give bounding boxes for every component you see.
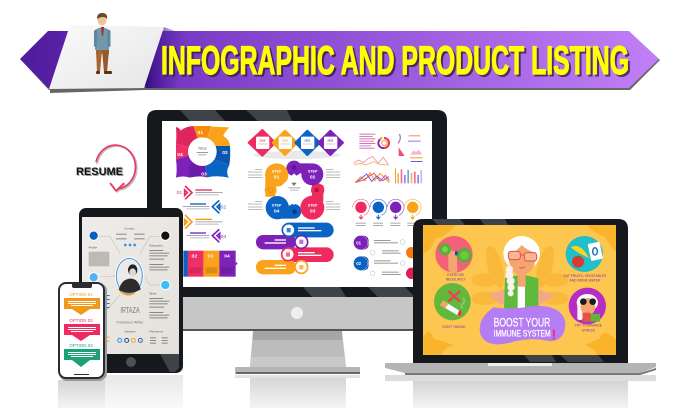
step diagram: 02: [310, 174, 316, 180]
lid highlights: [432, 219, 604, 362]
wheel numbers: 02: [222, 150, 228, 156]
laptop: [385, 219, 656, 375]
wheel hub text: TITLE: [198, 146, 206, 150]
woman illustration: [488, 236, 557, 311]
banner ribbon: [20, 31, 659, 88]
smartphone: [58, 282, 107, 381]
monitor chin: [147, 290, 447, 331]
numbered tabs: [183, 251, 238, 277]
phone screen: [60, 284, 103, 377]
skill bars: [105, 295, 110, 308]
floor reflections: [58, 375, 656, 408]
phone notch: [72, 284, 92, 288]
reference heading: Reference: [149, 329, 164, 333]
diamond timeline: 2019: [259, 139, 266, 143]
work icon: [161, 280, 170, 290]
portrait: [115, 257, 144, 295]
diamond timeline: 2020: [282, 139, 288, 143]
bar chart: [395, 168, 422, 183]
exercise icon: [435, 236, 473, 273]
line chart 2: [355, 173, 389, 183]
banner ribbon shadow: [21, 32, 660, 90]
numbered tabs: 04: [224, 253, 230, 259]
numbered tabs: 02: [192, 253, 197, 259]
tablet resume: [79, 208, 183, 373]
address heading: Address: [125, 329, 136, 333]
tablet home button: [126, 357, 136, 367]
slogan: IMMUNE SYSTEM: [494, 329, 551, 339]
donut chart: [378, 137, 389, 148]
step diagram: 01: [274, 174, 280, 180]
resume text: RESUME: [77, 167, 124, 179]
flower behind woman: [472, 244, 568, 305]
step diagram: 04: [274, 208, 280, 214]
profile text: Profile: [89, 245, 97, 249]
phone home bar: [74, 374, 89, 375]
target circles row: [353, 199, 421, 226]
diamond timeline: 2022: [327, 139, 334, 143]
option 01: OPTION 01: [69, 292, 93, 297]
slogan: !: [551, 327, 556, 343]
stress label: STRESS: [582, 328, 596, 332]
item 03: [185, 215, 223, 229]
wheel hub: [188, 137, 217, 166]
stress label: [575, 324, 603, 332]
tablet screen: [82, 217, 179, 354]
step diagram: STEP: [308, 203, 318, 207]
step arrows list: [177, 186, 226, 242]
curved arrow: [96, 145, 135, 191]
fruit label: EAT FRUITS, VEGETABLES: [564, 274, 607, 278]
no smoking icon: [434, 283, 471, 320]
pill list: [256, 223, 334, 274]
mini lines: [398, 134, 423, 162]
slogan blob: [480, 306, 565, 344]
curved arrow shadow: [97, 146, 137, 192]
fruit icon: [566, 236, 603, 272]
step diagram: [248, 161, 340, 220]
option 02: OPTION 02: [69, 318, 93, 323]
step diagram: STEP: [272, 169, 282, 173]
diamond timeline: 2021: [304, 139, 311, 143]
wheel infographic: [176, 126, 230, 178]
bottom right list: 01: [356, 240, 362, 245]
name: IRTAZA: [120, 306, 140, 315]
exercise label: EXERCISE: [447, 273, 465, 277]
bottom right list: [354, 235, 417, 279]
laptop lid: [413, 219, 628, 363]
item 02: 02: [221, 205, 226, 211]
work text: Work: [149, 292, 157, 296]
monitor screen: [162, 121, 432, 287]
monitor camera dot: [291, 307, 303, 319]
banner: [20, 13, 660, 93]
smoke label: DON'T SMOKE: [443, 325, 466, 329]
diamond timeline: [249, 130, 343, 159]
monitor bezel: [147, 110, 447, 297]
tablet content: [89, 227, 170, 344]
resume text: RESUME: [76, 166, 123, 178]
profile icon: [89, 231, 98, 240]
connector dots: [268, 165, 319, 214]
laptop base: [385, 363, 656, 373]
screen content: [176, 126, 423, 279]
fruit label: AND DRINK WATER: [570, 279, 601, 283]
stress label: TRY TO MANAGE: [575, 324, 603, 328]
slogan: [494, 316, 556, 343]
contact heading: Contact: [124, 227, 135, 231]
bezel highlights: [180, 110, 415, 297]
three dots: [124, 244, 136, 246]
small charts: [353, 134, 423, 183]
education text: Education: [149, 243, 163, 247]
fruit label: [564, 274, 607, 283]
phone shadow: [59, 283, 107, 381]
connector lines: [98, 237, 160, 310]
education icon: [161, 231, 170, 240]
wheel numbers: 04: [177, 152, 183, 158]
desktop monitor: [147, 110, 447, 374]
exercise label: [446, 273, 466, 282]
background flowers: [423, 225, 616, 355]
wheel numbers: 03: [201, 171, 207, 177]
step diagram: 03: [310, 208, 316, 214]
white name panel: [49, 25, 164, 89]
wheel numbers: [177, 130, 228, 177]
center diamond: [278, 173, 310, 205]
option 03: OPTION 03: [69, 343, 93, 348]
striped bars: [359, 134, 375, 149]
timeline shadow: [253, 151, 340, 159]
phone body: [58, 282, 105, 379]
skills icon: [89, 273, 98, 282]
bottom right list: 02: [356, 261, 362, 266]
item 01: 01: [177, 190, 182, 196]
wheel numbers: 01: [198, 130, 203, 136]
monitor stand: [235, 331, 360, 374]
reference details: [150, 337, 168, 344]
line chart 1: [353, 157, 389, 165]
job title: Freelance Writer: [117, 321, 144, 325]
numbered tabs: 03: [208, 253, 213, 259]
stress icon: [569, 288, 606, 324]
tablet body: [79, 208, 183, 373]
exercise label: REGULARLY: [446, 278, 466, 282]
dark fold beside panel: [144, 27, 190, 88]
step diagram: STEP: [272, 203, 282, 207]
contact details: [116, 234, 145, 239]
base shadow edge: [405, 368, 656, 375]
icon: cartoon man: [94, 13, 112, 74]
tablet lower sheen: [160, 354, 179, 372]
address icons: [118, 338, 142, 342]
slogan: BOOST YOUR: [494, 316, 550, 330]
step diagram: STEP: [308, 169, 318, 173]
laptop screen: [423, 225, 616, 355]
screen content: [423, 225, 616, 355]
item 04: 04: [221, 234, 226, 240]
white name panel shadow: [50, 86, 146, 93]
resume label with arrow: [76, 145, 137, 192]
laptop notch: [488, 363, 552, 366]
